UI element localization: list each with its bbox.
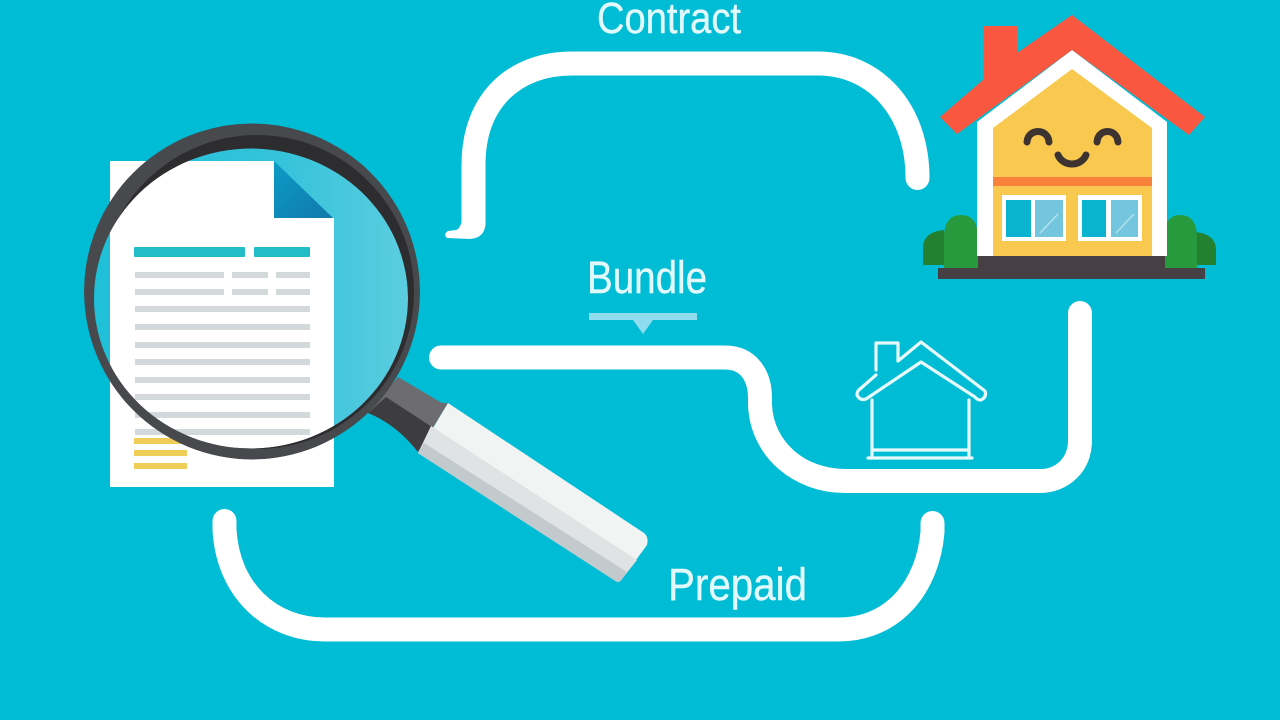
roof and chimney bbox=[940, 15, 1205, 135]
magnifier handle bbox=[368, 377, 648, 582]
icon: small outline house bbox=[857, 342, 986, 458]
smiling face bbox=[1027, 132, 1118, 164]
label: Prepaid: Prepaid bbox=[668, 559, 807, 610]
route: bundle path bbox=[441, 313, 1080, 481]
magnifier ring bbox=[84, 124, 420, 460]
icon: magnifying glass over document bbox=[84, 124, 648, 582]
house base bbox=[938, 256, 1205, 279]
lens bbox=[93, 148, 409, 450]
route: contract path bbox=[445, 64, 918, 239]
infographic canvas bbox=[84, 2, 1216, 642]
route: prepaid path bbox=[224, 521, 932, 630]
left window bbox=[1002, 195, 1066, 241]
document header bars bbox=[134, 247, 310, 257]
icon: smiling house bbox=[923, 15, 1216, 279]
document fold bbox=[274, 161, 333, 218]
bushes bbox=[923, 215, 1216, 268]
house walls bbox=[977, 50, 1167, 256]
house stripe bbox=[993, 177, 1152, 186]
right window bbox=[1078, 195, 1142, 241]
document text lines bbox=[135, 272, 310, 435]
document yellow lines bbox=[134, 438, 187, 469]
label: Bundle: Bundle bbox=[587, 252, 707, 303]
bundle marker bbox=[589, 313, 697, 334]
document bbox=[110, 161, 334, 487]
